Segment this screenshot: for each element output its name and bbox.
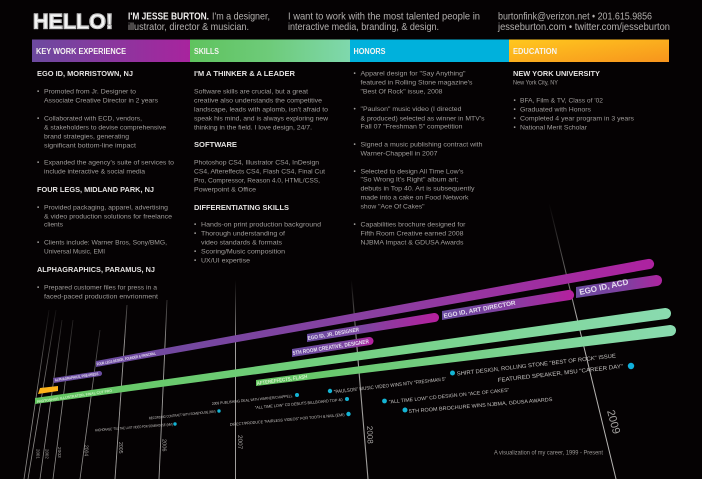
- timeline: work experience bars: [53, 259, 662, 383]
- intro text: [128, 12, 270, 33]
- year labels: 2006: [160, 439, 166, 451]
- panel: key work experience text: FOUR LEGS, MIDLAND PARK, NJ: [37, 185, 154, 194]
- panel: honors text: Signed a music publishing contract with: [360, 142, 483, 148]
- panel: skills text: Software skills are crucial, but a great: [194, 88, 308, 96]
- bar: aftereffects, flash: AFTEREFFECTS, FLASH: [256, 374, 308, 387]
- intro text: I'm a designer,: [212, 12, 270, 22]
- panel: skills text: I'M A THINKER & A LEADER: [194, 69, 296, 78]
- year labels: 2007: [236, 435, 243, 450]
- milestone: paulson: "PAULSON" MUSIC VIDEO WINS MTV "FRESHMAN 5": [334, 377, 447, 395]
- panel: key work experience text: •: [37, 160, 40, 166]
- panel: honors text: •: [354, 106, 356, 113]
- panel: education text: Graduated with Honors: [520, 106, 592, 114]
- panel: education text: Completed 4 year program in 3 years: [520, 116, 635, 122]
- panel: skills text: video standards & formats: [201, 240, 283, 246]
- panel: key work experience text: Provided packaging, apparel, advertising: [44, 204, 168, 212]
- panel header: honors: HONORS: [354, 47, 386, 56]
- bar: 5th room creative, designer: 5TH ROOM CREATIVE, DESIGNER: [292, 339, 369, 357]
- contact details: [497, 12, 670, 33]
- panel: honors text: •: [354, 142, 356, 148]
- year labels: 2002: [44, 449, 50, 459]
- milestone: publishing deal: 2009 PUBLISHING DEAL WITH WARNER/CHAPPELL: [212, 394, 293, 406]
- panel: honors text: •: [354, 168, 356, 176]
- panel: education text: •: [514, 106, 516, 114]
- intro text: I'M JESSE BURTON.: [128, 12, 209, 22]
- panel: skills text: Photoshop CS4, Illustrator CS4, InDesign: [194, 160, 319, 166]
- bar: ego id, art director: EGO ID, ART DIRECTOR: [443, 300, 517, 320]
- objective text: interactive media, branding, & design.: [288, 22, 439, 33]
- panel: honors text: & produced) selected as winner in MTV's: [360, 116, 485, 122]
- bar: core software: PHOTOSHOP, ILLUSTRATOR, FINAL CUT PRO: [37, 389, 113, 404]
- title: HELLO!: HELLO!: [33, 10, 113, 34]
- panel: education text: NEW YORK UNIVERSITY: [513, 69, 600, 78]
- panel: key work experience text: Associate Creative Director in 2 years: [44, 98, 159, 104]
- panel: skills text: landscape, leads with aplomb, isn't afraid to: [194, 106, 328, 114]
- year labels: 2001: [36, 449, 40, 459]
- panel: key work experience text: •: [37, 116, 40, 122]
- panel: education text: National Merit Scholar: [520, 124, 588, 132]
- bar: ego id, acd: [576, 275, 662, 298]
- panel header: education: [509, 40, 669, 62]
- timeline: skills bars: [35, 308, 676, 404]
- objective text: I want to work with the most talented people in: [288, 12, 480, 22]
- panel: skills text: •: [194, 222, 197, 228]
- panel: key work experience text: significant bottom-line impact: [44, 142, 136, 150]
- panel: skills text: [194, 69, 328, 264]
- bar: ego id, art director: [442, 290, 574, 320]
- panel: honors text: Fifth Room Creative earned 2008: [360, 230, 464, 238]
- panel: key work experience text: ALPHAGRAPHICS, PARAMUS, NJ: [37, 265, 155, 274]
- bar: ego id, jr designer: [307, 313, 439, 342]
- panel: skills text: creative also understands the competitive: [194, 98, 322, 104]
- timeline: orange education bar: [38, 386, 58, 394]
- panel header: key work experience: KEY WORK EXPERIENCE: [36, 47, 127, 56]
- panel: key work experience text: Universal Music, EMI: [44, 248, 105, 256]
- panel: skills text: Scoring/Music composition: [201, 248, 285, 256]
- milestone: direct/produce: DIRECT/PRODUCE "FAIRLESS VIDEOS" FOR TOOTH & NAIL (EMI): [230, 412, 345, 427]
- panel: honors text: show "Ace Of Cakes": [360, 204, 425, 210]
- panel: honors text: NJBMA Impact & GDUSA Awards: [360, 240, 464, 246]
- milestone: shirt design: SHIRT DESIGN, ROLLING STONE "BEST OF ROCK" ISSUE: [457, 353, 616, 377]
- year labels: 2008: [365, 426, 375, 444]
- panel: skills text: DIFFERENTIATING SKILLS: [194, 203, 289, 212]
- panel: key work experience text: •: [37, 240, 40, 246]
- panel header: key work experience: [32, 40, 190, 62]
- timeline year gridlines: [24, 203, 616, 479]
- bar: four legs: [96, 259, 654, 367]
- panel: education text: New York City, NY: [513, 80, 559, 86]
- bar: aftereffects, flash: [256, 325, 676, 387]
- panel: honors text: featured in Rolling Stone magazine's: [360, 80, 473, 86]
- panel: key work experience text: •: [37, 204, 40, 212]
- panel: key work experience text: •: [37, 284, 40, 292]
- panel: key work experience text: [37, 69, 174, 300]
- milestone: all time low debuts: "ALL TIME LOW" CD DEBUTS BILLBOARD TOP 40: [255, 397, 343, 410]
- panel: honors text: Warner-Chappell in 2007: [360, 150, 438, 158]
- panel: honors text: •: [354, 222, 356, 228]
- panel: key work experience text: clients: [44, 222, 64, 228]
- panel: honors text: •: [354, 70, 356, 78]
- panel: skills text: CS4, Aftereffects CS4, Flash CS4, Final Cut: [194, 168, 325, 176]
- panel: honors text: made into a cake on Food Network: [360, 194, 469, 202]
- panel: skills text: Powerpoint & Office: [194, 186, 256, 194]
- panel: skills text: SOFTWARE: [194, 140, 237, 149]
- panel: skills text: •: [194, 248, 197, 256]
- panel: education text: •: [514, 116, 516, 122]
- bar: core software: [35, 308, 671, 404]
- panel: key work experience text: include interactive & social media: [44, 168, 145, 176]
- panel: education text: [513, 69, 635, 132]
- panel: key work experience text: Promoted from Jr. Designer to: [44, 88, 136, 96]
- title: HELLO!: HELLO!: [33, 10, 113, 34]
- panel: skills text: Pro, Compressor, Reason 4.0, HTML/CSS,: [194, 178, 320, 184]
- milestone: recording contract: RECORDING CONTRACT WITH SOMEHOUSE (MM): [149, 410, 216, 420]
- panel: skills text: Thorough understanding of: [201, 230, 285, 238]
- panel: key work experience text: Collaborated with ECD, vendors,: [44, 116, 142, 122]
- milestone: ace of cakes: "ALL TIME LOW" CD DESIGN ON "ACE OF CAKES": [389, 387, 510, 405]
- panel: honors text: Capabilities brochure designed for: [360, 222, 466, 228]
- panel: honors text: "Best Of Rock" issue, 2008: [360, 88, 443, 96]
- panel: key work experience text: faced-paced production envrionment: [44, 294, 158, 300]
- panel: honors text: Apparel design for "Say Anything": [360, 70, 466, 78]
- bar: four legs: FOUR LEGS DESIGN, FOUNDER & PRINCIPAL: [96, 352, 157, 366]
- panel: education text: BFA, Film & TV, Class of '02: [520, 98, 603, 104]
- panel: key work experience text: & video production solutions for freelance: [44, 214, 172, 220]
- milestone: featured speaker: FEATURED SPEAKER, MSU "CAREER DAY": [498, 364, 623, 384]
- panel: key work experience text: & stakeholders to devise comprehensive: [44, 124, 166, 132]
- panel: skills text: •: [194, 230, 197, 238]
- year labels: 2005: [117, 442, 123, 454]
- panel: skills text: thinking in the field. I love design, 24/7.: [194, 124, 312, 132]
- panel: key work experience text: Clients include: Warner Bros, Sony/BMG,: [44, 240, 167, 246]
- panel header: skills: [190, 40, 350, 62]
- panel: skills text: •: [194, 258, 197, 264]
- panel: key work experience text: EGO ID, MORRISTOWN, NJ: [37, 69, 133, 78]
- panel header: skills: SKILLS: [194, 47, 220, 56]
- panel: honors text: Selected to design All Time Low's: [360, 168, 464, 176]
- year labels: 2004: [82, 445, 88, 456]
- milestone: 5th room brochure: 5TH ROOM BROCHURE WINS NJBMA, GDUSA AWARDS: [409, 397, 553, 415]
- panel: key work experience text: Prepared customer files for press in a: [44, 284, 157, 292]
- contact details: jesseburton.com • twitter.com/jesseburton: [497, 22, 670, 33]
- panel: skills text: UX/UI expertise: [201, 258, 250, 264]
- caption: A visualization of my career, 1999 - Present: [494, 450, 603, 456]
- panel header: education: EDUCATION: [513, 47, 557, 56]
- panel header: honors: [350, 40, 509, 62]
- panel: honors text: Fall 07 "Freshman 5" competition: [360, 124, 463, 130]
- year labels: [36, 409, 622, 459]
- bar: alphagraphics: ALPHAGRAPHICS, PRE-PRESS: [55, 372, 99, 382]
- contact details: burtonfink@verizon.net • 201.615.9856: [498, 12, 652, 22]
- panel: education text: •: [514, 124, 516, 132]
- panel: skills text: speak his mind, and is always exploring new: [194, 116, 328, 122]
- panel: honors text: debuts in Top 40. Art is subsequently: [360, 186, 475, 192]
- panel: key work experience text: brand strategies, generating: [44, 134, 129, 140]
- panel: skills text: Hands-on print production background: [201, 222, 321, 228]
- panel: education text: •: [514, 98, 516, 104]
- year labels: 2009: [604, 409, 622, 435]
- panel: honors text: [354, 70, 485, 246]
- objective text: [288, 12, 480, 33]
- panel: honors text: "Paulson" music video (I directed: [360, 106, 462, 113]
- panel: key work experience text: •: [37, 88, 40, 96]
- year labels: 2003: [56, 447, 62, 458]
- timeline: honors milestones: [95, 353, 634, 432]
- milestone: anchorage: [95, 422, 177, 432]
- panel: key work experience text: Expanded the agency's suite of services to: [44, 160, 174, 166]
- milestone: anchorage: ANCHORAGE "TILL THE LAST VIDEO FOR SOMEHOUSE (MM): [95, 423, 173, 432]
- panel: honors text: "So Wrong It's Right" album art;: [360, 176, 459, 184]
- bar: ego id, acd: EGO ID, ACD: [578, 277, 629, 297]
- intro text: illustrator, director & musician.: [128, 22, 249, 33]
- bar: ego id, jr designer: EGO ID, JR. DESIGNER: [307, 327, 360, 342]
